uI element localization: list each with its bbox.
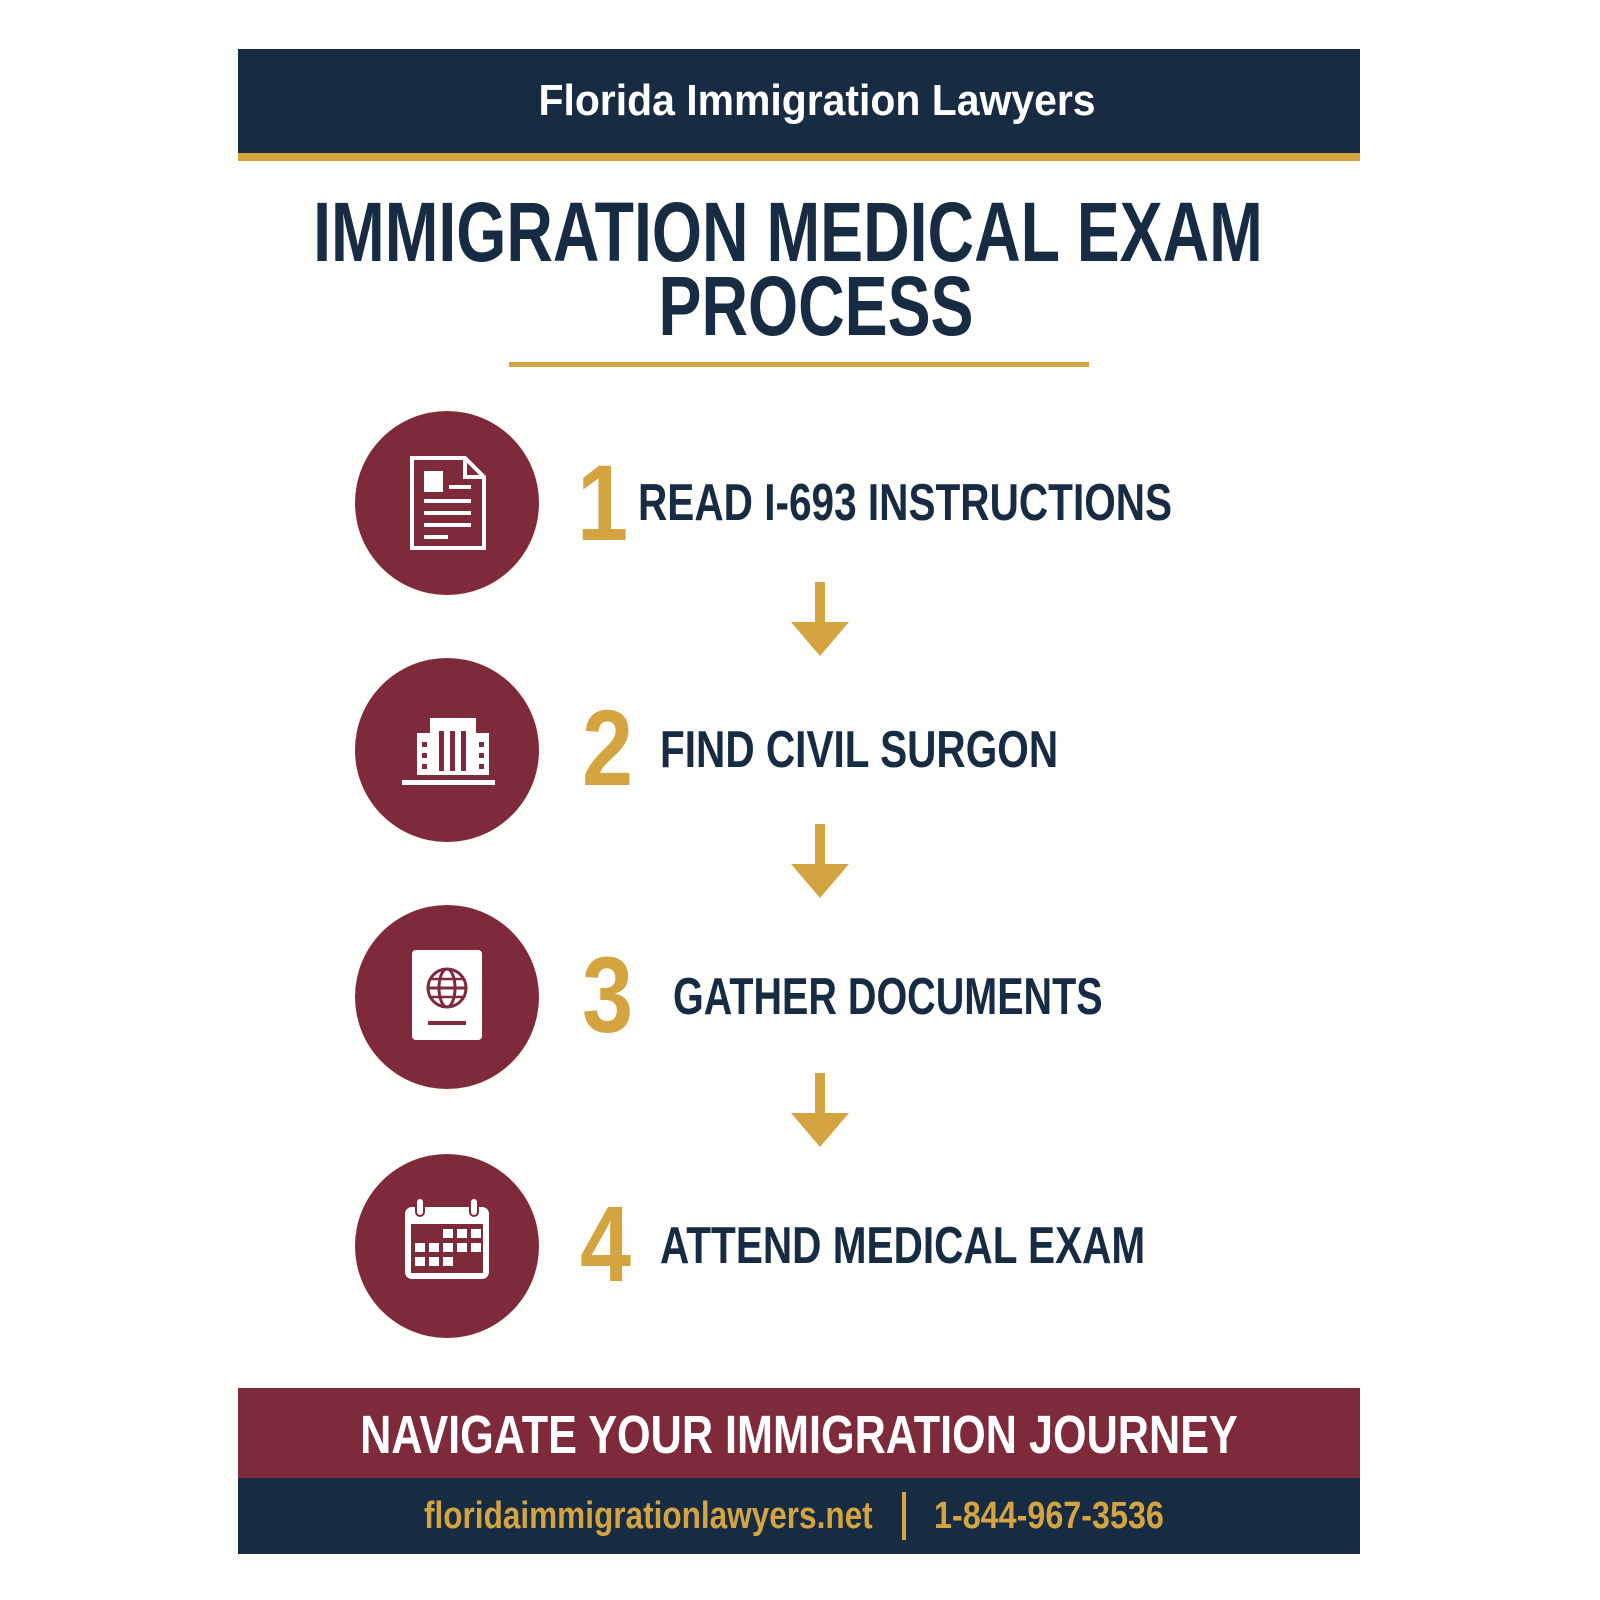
step 2 text: FIND CIVIL SURGON: [660, 721, 1058, 779]
step 2: [355, 658, 1058, 842]
arrow 3: [791, 1073, 849, 1147]
title: IMMIGRATION MEDICAL EXAM: [313, 185, 1263, 279]
title: [313, 185, 1263, 353]
footer banner: [238, 1388, 1360, 1478]
number 3: 3: [582, 934, 633, 1055]
gold stripe: [238, 153, 1360, 161]
header bar: [238, 49, 1360, 153]
icon: calendar: [355, 1154, 539, 1338]
arrow 2: [791, 824, 849, 898]
step 3: [355, 905, 1103, 1089]
step 1: [355, 411, 1172, 595]
icon: document: [355, 411, 539, 595]
number 2: 2: [582, 687, 633, 808]
icon: passport: [355, 905, 539, 1089]
step 4: [355, 1154, 1145, 1338]
title underline: [509, 362, 1089, 367]
step 4 text: ATTEND MEDICAL EXAM: [660, 1217, 1145, 1275]
phone: 1-844-967-3536: [934, 1495, 1164, 1537]
number 1: 1: [577, 442, 628, 563]
step 1 text: READ I-693 INSTRUCTIONS: [638, 474, 1172, 532]
arrow 1: [791, 582, 849, 656]
number 4: 4: [580, 1183, 631, 1304]
title: PROCESS: [658, 259, 974, 353]
website: floridaimmigrationlawyers.net: [424, 1495, 873, 1537]
icon: building: [355, 658, 539, 842]
step 3 text: GATHER DOCUMENTS: [673, 968, 1103, 1026]
header text: Florida Immigration Lawyers: [538, 76, 1096, 125]
footer tagline: NAVIGATE YOUR IMMIGRATION JOURNEY: [360, 1405, 1238, 1465]
footer contact bar: [238, 1478, 1360, 1554]
